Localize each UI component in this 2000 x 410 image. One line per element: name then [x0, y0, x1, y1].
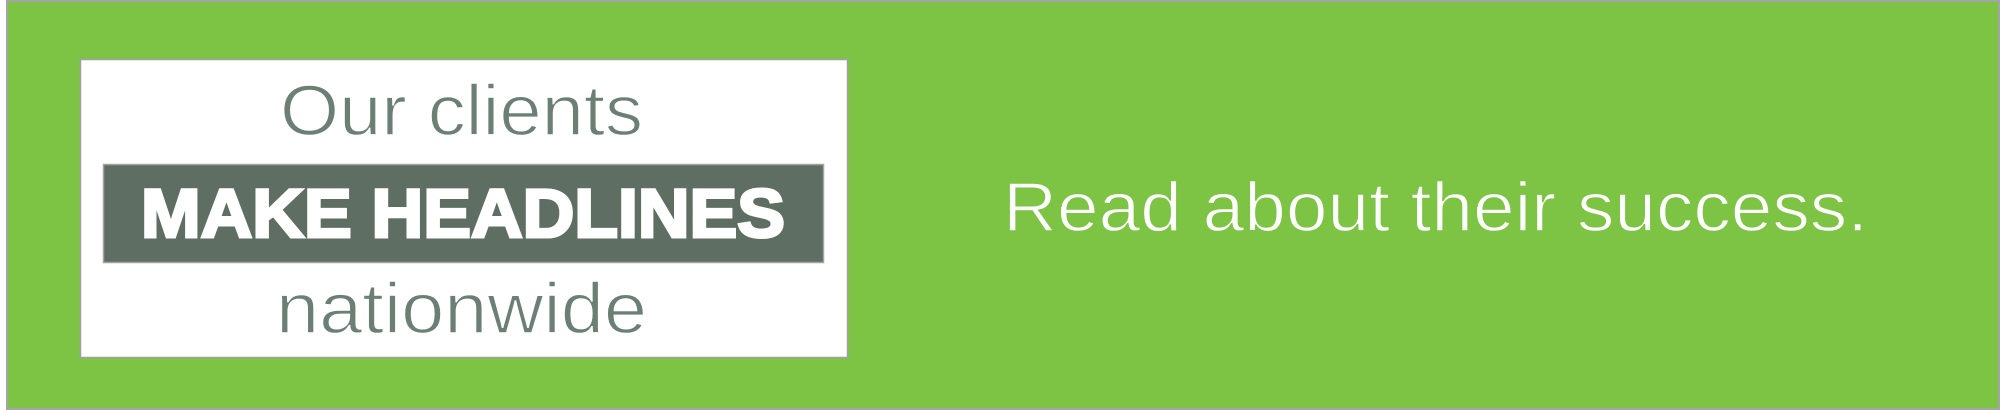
heading: Our clients: Our clients: [280, 72, 643, 151]
panel: dark headline bar: [104, 164, 824, 262]
text: nationwide: nationwide: [276, 270, 647, 349]
panel: white headline box: [80, 60, 848, 358]
callout: Read about their success.: Read about their success.: [1003, 168, 1868, 246]
heading: MAKE HEADLINES: MAKE HEADLINES: [141, 175, 785, 252]
